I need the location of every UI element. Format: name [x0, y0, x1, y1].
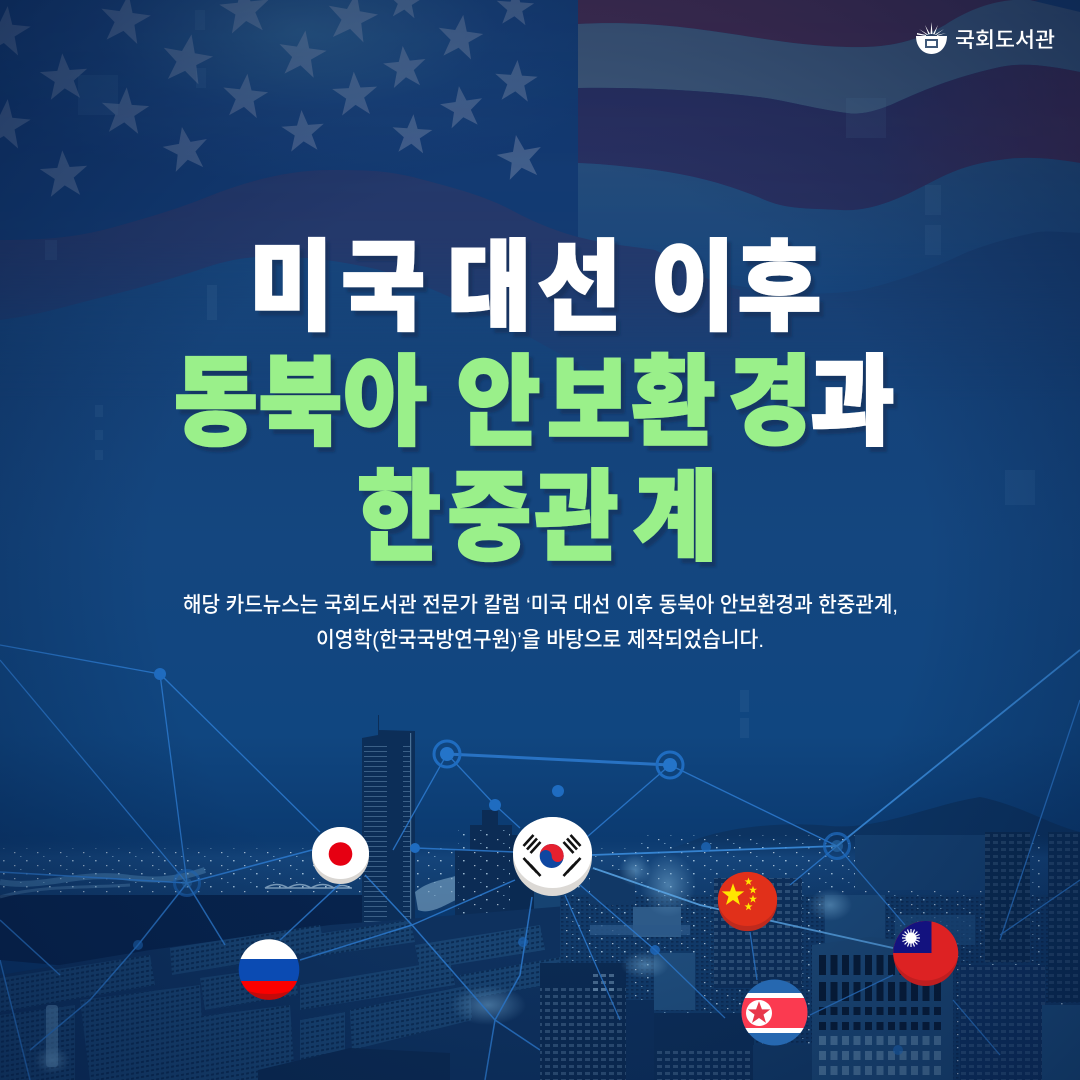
dark roof block	[258, 1048, 450, 1080]
right background buildings	[590, 832, 1080, 1080]
logo wordmark: 국회도서관	[955, 29, 1055, 52]
decorative data squares	[45, 10, 1035, 738]
tall tower	[362, 715, 415, 925]
subtitle text: 해당 카드뉴스는 국회도서관 전문가 칼럼 ‘미국 대선 이후 동북아 안보환경과 한중관계,	[183, 593, 898, 617]
title	[174, 233, 894, 573]
flag: North Korea	[741, 979, 808, 1047]
flag: Taiwan	[893, 920, 959, 987]
title line 2: 동북아 안보환경	[174, 348, 812, 458]
dark foreground blocks	[540, 963, 813, 1080]
network nodes	[133, 668, 903, 1055]
logo: National Assembly Library	[916, 22, 1055, 54]
lower wave	[0, 170, 740, 400]
haze patches	[619, 853, 852, 979]
title line 3: 한중관계	[357, 463, 717, 573]
flag: China	[718, 872, 777, 931]
network lines	[0, 645, 1080, 1080]
subtitle text	[183, 593, 898, 652]
left apartment city base	[0, 900, 640, 1080]
river	[0, 895, 365, 968]
title line 2: 과	[810, 348, 894, 458]
logo icon: open book bowl	[916, 22, 947, 54]
mid towers	[455, 810, 564, 935]
right city base	[560, 895, 1080, 1080]
background: waving American flag	[0, 0, 1080, 309]
foreground office building	[812, 937, 953, 1080]
flag canton with stars	[0, 0, 578, 196]
distant hills and horizon band	[0, 797, 1080, 910]
flag: Japan	[312, 827, 369, 884]
flag: South Korea	[513, 817, 592, 896]
city skyline	[0, 715, 1080, 1080]
apartment blocks	[0, 920, 600, 1080]
bright plaza	[450, 985, 526, 1025]
subtitle text: 이영학(한국국방연구원)’을 바탕으로 제작되었습니다.	[316, 628, 764, 652]
flag stripes	[578, 0, 1080, 400]
lower left tower glow	[34, 1005, 70, 1074]
title line 1: 미국 대선 이후	[249, 233, 821, 343]
flag: Russia	[238, 939, 300, 1001]
river glow and bridge	[0, 870, 458, 911]
